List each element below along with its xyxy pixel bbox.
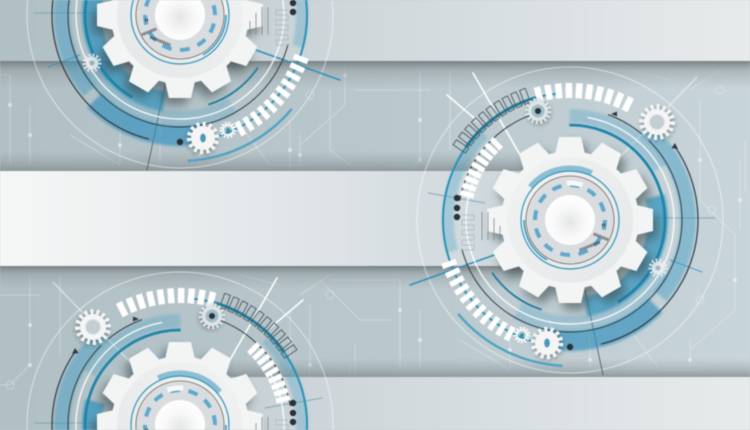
white tick comb: inner left [460, 139, 501, 196]
outer faint rings [417, 67, 723, 373]
circuit pattern: bottom left [0, 278, 356, 390]
inner rings [497, 147, 643, 293]
gear assembly: top left [26, 0, 342, 170]
arrowheads [611, 112, 678, 149]
gear face ring [507, 157, 633, 283]
small gear: top [526, 100, 550, 122]
main gear [487, 137, 653, 303]
shadow under middle banner [0, 266, 570, 290]
white tick comb: top [537, 83, 631, 111]
small gear: bottom [533, 329, 561, 357]
shadow above bottom banner [180, 358, 750, 377]
middle banner [0, 171, 570, 266]
circuit pattern: right [288, 70, 745, 370]
dark gear marks [580, 225, 609, 250]
radial lines [410, 73, 715, 375]
small gear: right [650, 260, 666, 276]
circuit pattern: top left [8, 72, 347, 164]
outlined tick comb [453, 88, 530, 153]
blue wash bands [399, 49, 741, 391]
gear assembly: right [392, 42, 748, 398]
white tick comb: lower left [442, 261, 513, 340]
black dots [454, 195, 573, 350]
shadow under top banner [0, 61, 750, 89]
gear centre disc [527, 177, 613, 263]
arcs [392, 42, 748, 398]
bottom banner [180, 377, 750, 430]
small gear: outlined [515, 328, 529, 342]
small gear: upper right [642, 106, 672, 138]
hub [545, 195, 595, 245]
gear assembly: bottom left [26, 271, 334, 430]
top banner [180, 0, 750, 61]
shadow above middle banner [0, 150, 570, 171]
faint box comb on gear edge [462, 212, 500, 250]
